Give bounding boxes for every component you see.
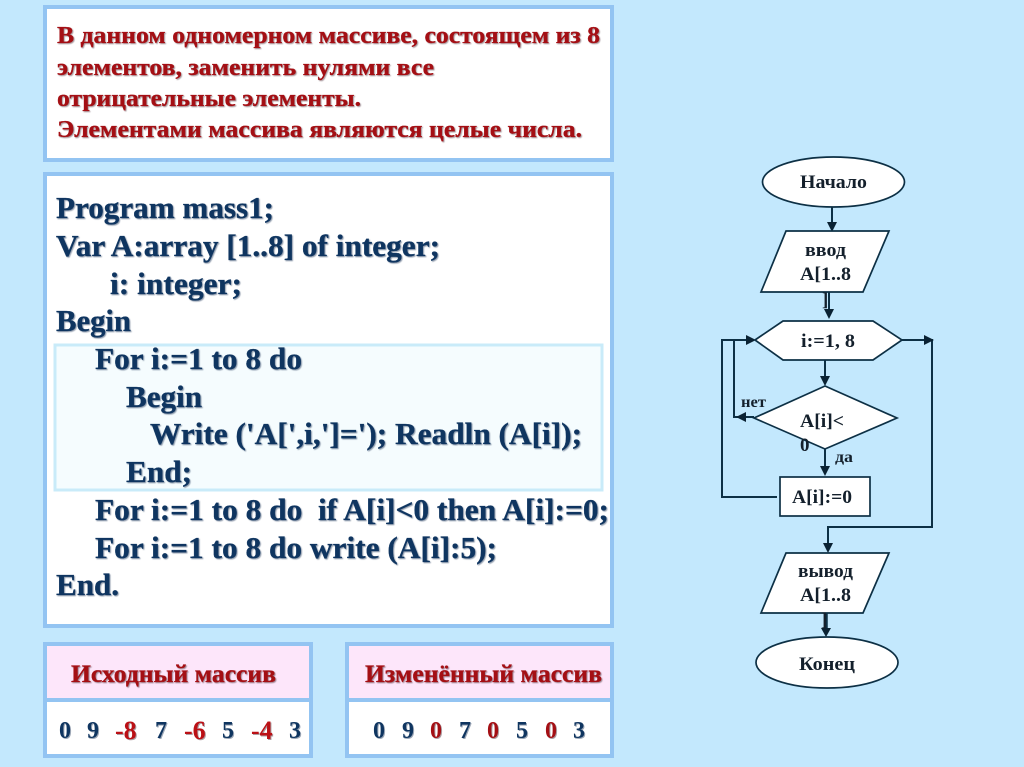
source array values: 5: [222, 718, 234, 744]
connector: output to end: [821, 613, 831, 637]
assignment rectangle: [780, 477, 870, 516]
changed array values: 0: [487, 718, 499, 744]
output parallelogram: ]: [821, 610, 827, 631]
task text: В данном одномерном массиве, состоящем из 8: [57, 23, 600, 49]
input parallelogram: ]: [822, 290, 828, 311]
output parallelogram: A[1..8: [800, 585, 851, 606]
connector: loop to condition: [820, 360, 830, 386]
code listing: Var A:array [1..8] of integer;: [56, 228, 440, 263]
connector: no branch back to loop: [734, 340, 754, 422]
source array values: 3: [289, 718, 301, 744]
input parallelogram: [761, 231, 889, 311]
changed array values: 7: [459, 718, 471, 744]
task text: Элементами массива являются целые числа.: [57, 117, 582, 143]
changed array values: 9: [402, 718, 414, 744]
condition diamond: A[i]<: [800, 411, 844, 432]
panel: changed array: [347, 644, 612, 756]
condition diamond: 0: [800, 435, 810, 456]
code listing: End;: [126, 454, 192, 489]
connector: start to input: [827, 207, 837, 232]
output parallelogram: вывод: [798, 561, 853, 582]
task text: отрицательные элементы.: [57, 86, 361, 112]
changed array values: 0: [373, 718, 385, 744]
panel: source array: [45, 644, 311, 756]
condition diamond: [754, 386, 897, 456]
source array values: 0: [59, 718, 71, 744]
flowchart: [722, 157, 934, 688]
highlighted input loop box: [55, 345, 602, 490]
connector: condition to assignment: [820, 449, 830, 476]
changed array values: 3: [573, 718, 585, 744]
code listing: Begin: [126, 379, 202, 414]
loop hexagon: [755, 321, 902, 360]
source array values: [59, 716, 301, 745]
label: yes: да: [835, 449, 853, 466]
code listing: Write ('A[',i,']='); Readln (A[i]);: [150, 416, 582, 451]
loop hexagon: i:=1, 8: [801, 331, 855, 352]
source array header: [47, 646, 309, 702]
code listing: End.: [56, 567, 119, 602]
end terminator: Конец: [799, 654, 855, 675]
source array values: -4: [251, 716, 273, 745]
assignment rectangle: A[i]:=0: [792, 487, 852, 508]
connector: input to loop: [824, 292, 834, 319]
changed array values: 5: [516, 718, 528, 744]
changed array header: [349, 646, 610, 702]
end terminator: [756, 637, 898, 688]
connector: loop exit to output: [823, 335, 934, 553]
panel: task statement: [45, 7, 612, 160]
changed array values: 0: [430, 718, 442, 744]
source array values: 7: [155, 718, 167, 744]
code listing: For i:=1 to 8 do if A[i]<0 then A[i]:=0;: [95, 492, 609, 527]
source array values: 9: [87, 718, 99, 744]
task text: элементов, заменить нулями все: [57, 55, 434, 81]
changed array values: [373, 718, 585, 744]
start terminator: Начало: [800, 172, 867, 193]
connector: loop back from assignment: [722, 335, 777, 497]
start terminator: [762, 157, 904, 207]
code listing: i: integer;: [110, 266, 242, 301]
task text: [57, 23, 600, 143]
source array values: -6: [184, 716, 206, 745]
code listing: For i:=1 to 8 do: [95, 341, 302, 376]
code listing: [56, 190, 609, 602]
label: no: нет: [741, 394, 766, 411]
changed array values: 0: [545, 718, 557, 744]
code listing: Begin: [56, 303, 131, 338]
changed array header: Изменённый массив: [365, 661, 602, 688]
input parallelogram: A[1..8: [800, 264, 851, 285]
panel: program code: [45, 174, 612, 626]
code listing: Program mass1;: [56, 190, 274, 225]
source array values: -8: [115, 716, 137, 745]
code listing: For i:=1 to 8 do write (A[i]:5);: [95, 530, 497, 565]
input parallelogram: ввод: [805, 240, 846, 261]
output parallelogram: [761, 553, 889, 631]
source array header: Исходный массив: [71, 661, 276, 688]
